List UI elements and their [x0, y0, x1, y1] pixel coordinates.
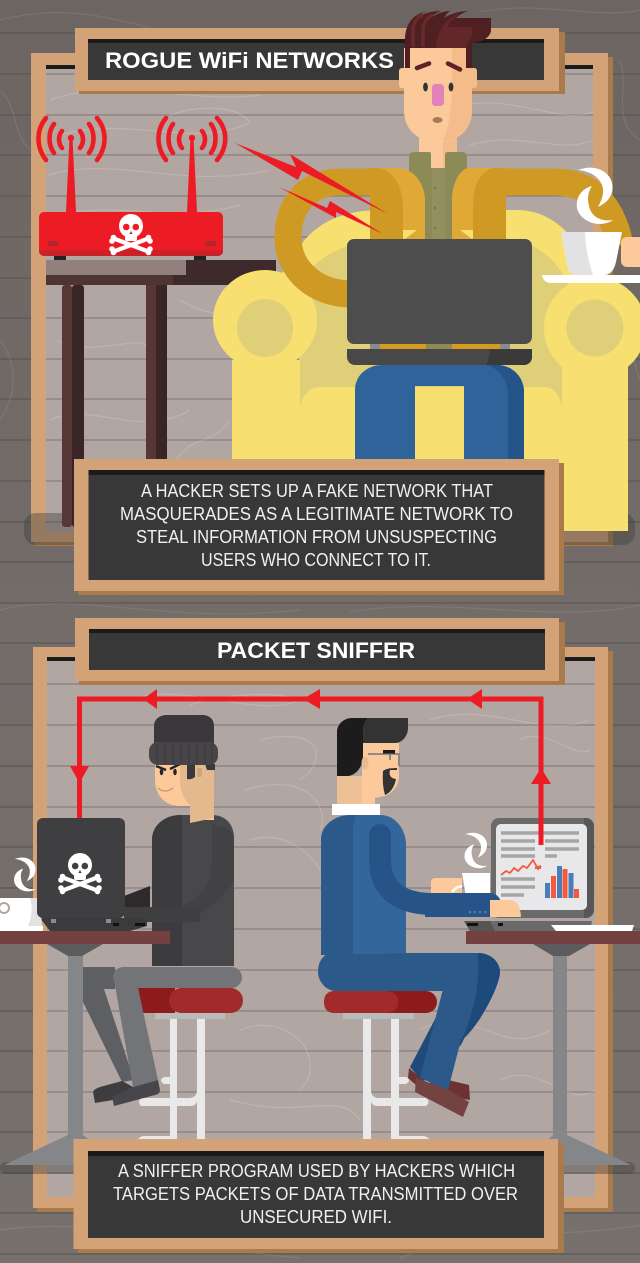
- icon: steam: [577, 168, 613, 224]
- right cafe table base: [520, 944, 631, 1165]
- line chart: [501, 860, 541, 875]
- hacker: head and beanie: [149, 715, 218, 823]
- man: head: [399, 11, 491, 168]
- neck: [419, 130, 457, 168]
- panel: rogue wifi back frame: [31, 53, 613, 546]
- man: torso: [321, 815, 406, 955]
- man: olive shirt: [409, 152, 467, 240]
- stool: hacker: [138, 988, 243, 1143]
- laptop on lap: [347, 239, 532, 365]
- hair: [405, 11, 491, 68]
- icon: steam: [465, 833, 487, 868]
- hacker: legs: [83, 967, 242, 1106]
- left table top: [0, 931, 170, 944]
- man: sleeve and hand: [380, 835, 521, 917]
- man with laptop: jeans: [355, 365, 524, 470]
- man laptop with chart: [464, 818, 594, 931]
- panel: packet sniffer description: UNSECURED WIFI.: [240, 1207, 392, 1227]
- hacker: torso: [124, 815, 234, 966]
- floor shadow top: [24, 513, 635, 545]
- man: legs: [318, 953, 500, 1117]
- panel: packet sniffer description: A SNIFFER PROGRAM USED BY HACKERS WHICH: [118, 1161, 515, 1181]
- sign: packet sniffer title: [75, 618, 565, 685]
- sign: rogue wifi title: ROGUE WiFi NETWORKS: [105, 48, 394, 73]
- coffee cup and saucer: [542, 168, 640, 283]
- right table top and saucer: [466, 925, 640, 944]
- lightning bolts: [235, 143, 388, 234]
- ears: [399, 68, 477, 88]
- panel: rogue wifi description: A HACKER SETS UP A FAKE NETWORK THAT: [141, 481, 493, 501]
- icon: skull: [58, 853, 102, 894]
- icon: wifi waves: [38, 118, 225, 160]
- face: [404, 48, 472, 142]
- left cafe table: [4, 944, 120, 1165]
- panel: packet sniffer back frame: [33, 647, 613, 1212]
- icon: steam: [14, 858, 36, 891]
- panel: packet sniffer description: [74, 1139, 564, 1253]
- panel: packet sniffer description: TARGETS PACKETS OF DATA TRANSMITTED OVER: [113, 1184, 518, 1204]
- man: coffee and hand: [431, 833, 490, 897]
- panel: rogue wifi description: [74, 459, 564, 595]
- face features: [417, 64, 460, 70]
- icon: router skull: [109, 214, 153, 255]
- stool: man: [324, 991, 437, 1143]
- man: gold jacket arms: [288, 168, 620, 294]
- sign: rogue wifi title: [75, 28, 565, 94]
- arrows: data flow: [70, 689, 551, 845]
- floor shadow bottom: [0, 1162, 635, 1174]
- panel: rogue wifi description: MASQUERADES AS A LEGITIMATE NETWORK TO: [120, 504, 513, 524]
- man: head and beard: [332, 718, 408, 815]
- sign: packet sniffer title: PACKET SNIFFER: [217, 638, 415, 663]
- panel: rogue wifi description: USERS WHO CONNECT TO IT.: [201, 550, 431, 570]
- side table: [46, 260, 276, 527]
- panel: rogue wifi description: STEAL INFORMATION FROM UNSUSPECTING: [136, 527, 497, 547]
- armchair: [213, 210, 640, 531]
- hacker laptop lid with skull: [37, 818, 125, 918]
- hacker laptop base: [40, 918, 147, 931]
- icon: red router: [38, 118, 225, 260]
- bar chart: [545, 866, 579, 898]
- coffee left: [0, 858, 43, 931]
